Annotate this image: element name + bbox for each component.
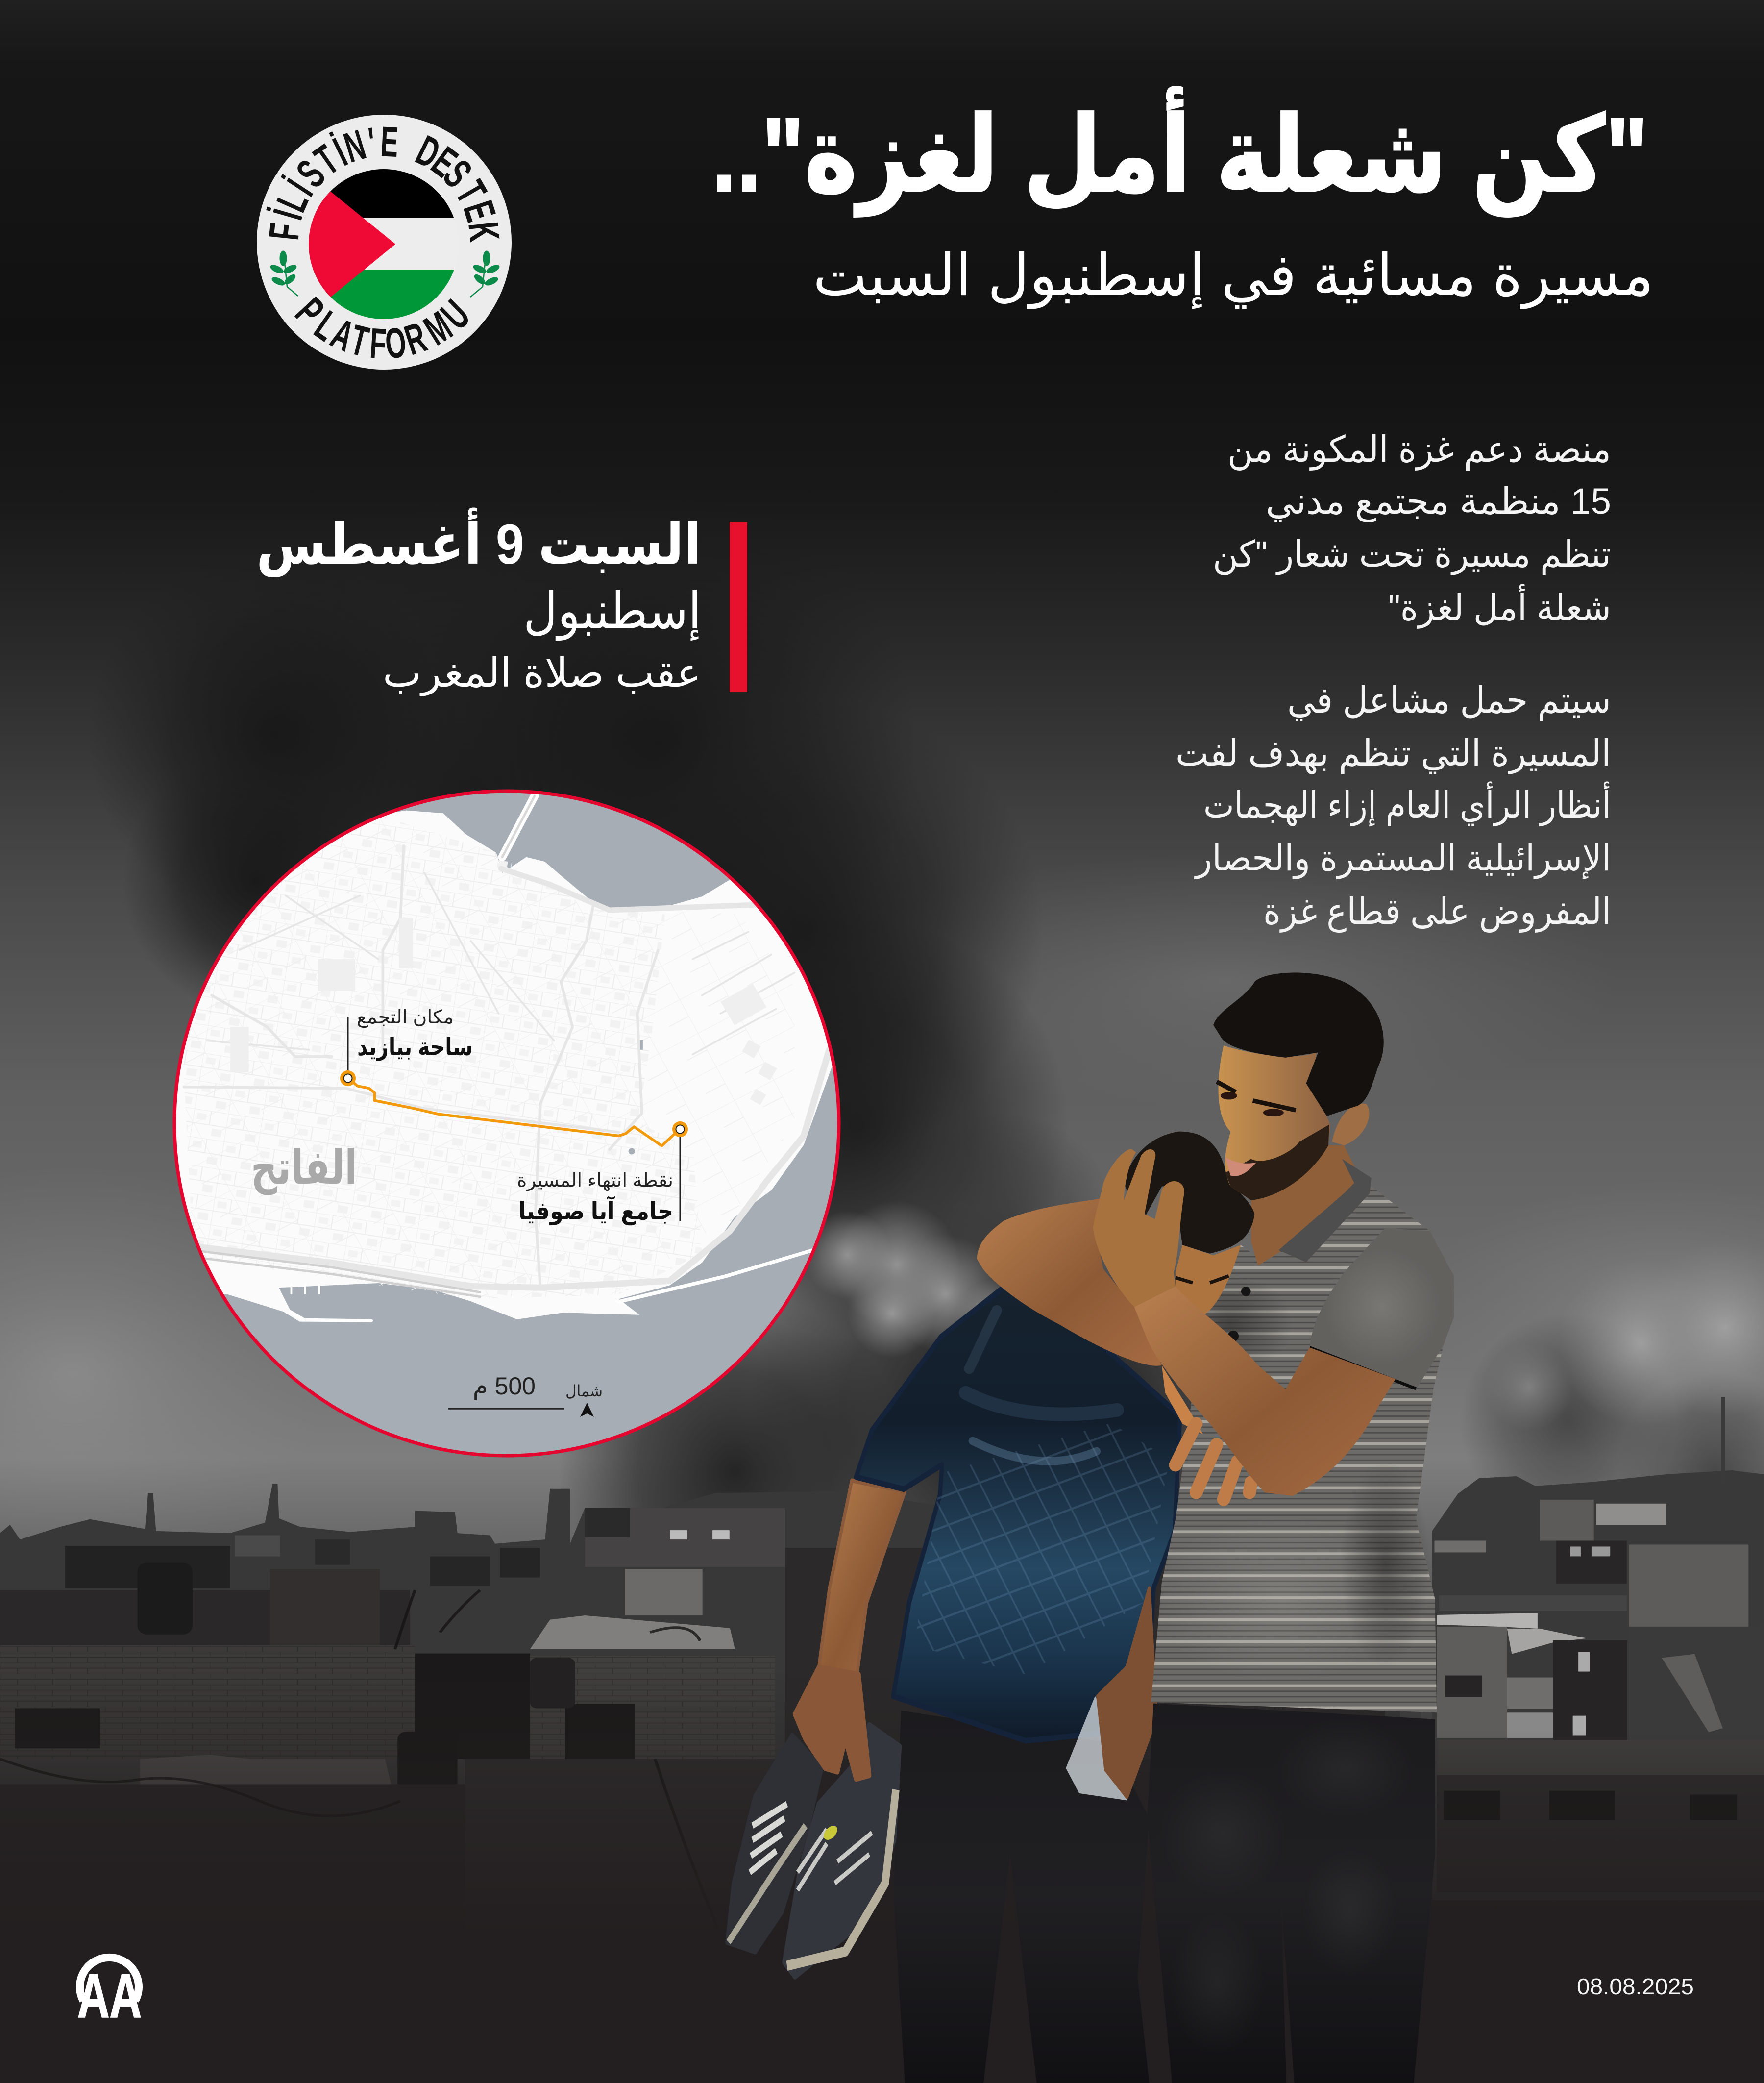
logo ring text top: E [379, 118, 399, 166]
smaller man: navy sweater [856, 1287, 1180, 1741]
taller man: jeans [1147, 1703, 1435, 2083]
logo ring text bottom: L [306, 302, 347, 350]
bridge [502, 796, 535, 857]
map label: end point: نقطة انتهاء المسيرة [517, 1170, 673, 1191]
north arrow: شمال [565, 1382, 603, 1400]
photo cut-out: upper bodies of the two men [966, 973, 1454, 1712]
scale bar: 500 م [473, 1372, 536, 1400]
smaller man: right forearm and bottle [1066, 1588, 1156, 1800]
smaller man: jeans [893, 1711, 1149, 2083]
logo ring text top: E [454, 196, 505, 227]
icon: Anadolu Agency logo: AA [77, 1961, 142, 2031]
background: ruined city skyline [0, 1397, 1764, 2083]
logo ring text bottom: A [324, 309, 361, 361]
logo flag [309, 169, 454, 319]
logo ring text bottom: F [368, 320, 388, 368]
logo ring text top: N [339, 121, 371, 172]
body text: second paragraph: المسيرة التي تنظم بهدف لفت [1176, 733, 1611, 774]
panel: route map [172, 789, 841, 1458]
logo ring text bottom: R [399, 313, 432, 365]
taller man: head [1213, 973, 1384, 1200]
logo ring text bottom: T [346, 316, 373, 366]
map geography [176, 794, 832, 1322]
logo ring text top: ' [366, 119, 378, 167]
body text: second paragraph: أنظار الرأي العام إزاء الهجمات [1203, 781, 1611, 826]
logo ring text top: D [409, 126, 447, 178]
logo ring text top: F [260, 221, 309, 242]
date stamp: 08.08.2025 [1577, 1974, 1694, 1999]
logo ring text bottom [286, 289, 479, 368]
logo ring text top: İ [264, 204, 312, 224]
logo ring text bottom: M [416, 302, 460, 354]
map label: district: الفاتح [251, 1141, 357, 1195]
city: إسطنبول [523, 583, 701, 641]
body text: first paragraph [1213, 429, 1611, 629]
logo ring text bottom: P [286, 289, 333, 334]
body text: first paragraph: منصة دعم غزة المكونة من [1227, 429, 1611, 471]
sweater highlights [966, 1310, 1117, 1461]
logo ring text top: K [459, 220, 509, 244]
map label: gathering place [357, 1007, 473, 1061]
date: السبت 9 أغسطس [256, 507, 701, 577]
body text: first paragraph: تنظم مسيرة تحت شعار "كن [1213, 534, 1611, 575]
logo ring text top: İ [278, 172, 322, 203]
logo ring text top: L [268, 184, 318, 219]
route line [348, 1078, 680, 1146]
body text: first paragraph: 15 منظمة مجتمع مدني [1266, 481, 1611, 522]
date block: red bar and details [256, 507, 747, 696]
logo ring text top: T [446, 173, 495, 211]
smaller man: left arm [819, 1481, 905, 1675]
logo ring text top: S [434, 151, 481, 197]
smaller man: hand holding shoes [795, 1667, 869, 1779]
map label: end point: جامع آيا صوفيا [518, 1196, 673, 1226]
photo cut-out: lower bodies of the two men [728, 1287, 1435, 2083]
logo: Filistin'e Destek Platformu [257, 115, 512, 370]
body text: first paragraph: شعلة أمل لغزة" [1388, 584, 1611, 629]
north arrow [565, 1382, 603, 1417]
map label: gathering place: مكان التجمع [357, 1007, 454, 1028]
logo ring text bottom: U [432, 291, 479, 338]
logo ring text top [260, 118, 509, 244]
taller man: back arm [977, 1198, 1251, 1499]
time: عقب صلاة المغرب [383, 651, 701, 696]
body text: second paragraph: سيتم حمل مشاعل في [1287, 680, 1611, 721]
icon: Anadolu Agency logo [77, 1958, 142, 2031]
taller man: shirt [1151, 1187, 1454, 1712]
taller man: front arm [1134, 1286, 1396, 1496]
map label: end point [517, 1170, 673, 1226]
map label: gathering place: ساحة بيازيد [357, 1033, 473, 1061]
marker: start with leader [340, 1017, 356, 1086]
logo ring text top: İ [326, 129, 354, 175]
body text: second paragraph [1176, 680, 1611, 933]
taller man: collar [1278, 1159, 1372, 1262]
logo ring text top: T [306, 136, 347, 184]
smaller man: head [1124, 1132, 1254, 1317]
logo ring text top: S [288, 151, 334, 197]
body text: second paragraph: الإسرائيلية المستمرة والحصار [1194, 838, 1611, 879]
logo olive branch left [270, 251, 298, 296]
subtitle: مسيرة مسائية في إسطنبول السبت [813, 243, 1654, 309]
logo olive branch right [470, 251, 500, 297]
red bar [730, 522, 747, 692]
body text: second paragraph: المفروض على قطاع غزة [1263, 891, 1611, 933]
marker: end with leader [672, 1121, 688, 1221]
taller man: hand on head [1093, 1149, 1184, 1307]
taller man: sleeve [1310, 1228, 1454, 1389]
taller man: neck [1251, 1145, 1365, 1265]
logo ring text bottom: O [383, 318, 409, 368]
logo ring text top: E [423, 138, 466, 186]
shoes [728, 1725, 900, 1977]
